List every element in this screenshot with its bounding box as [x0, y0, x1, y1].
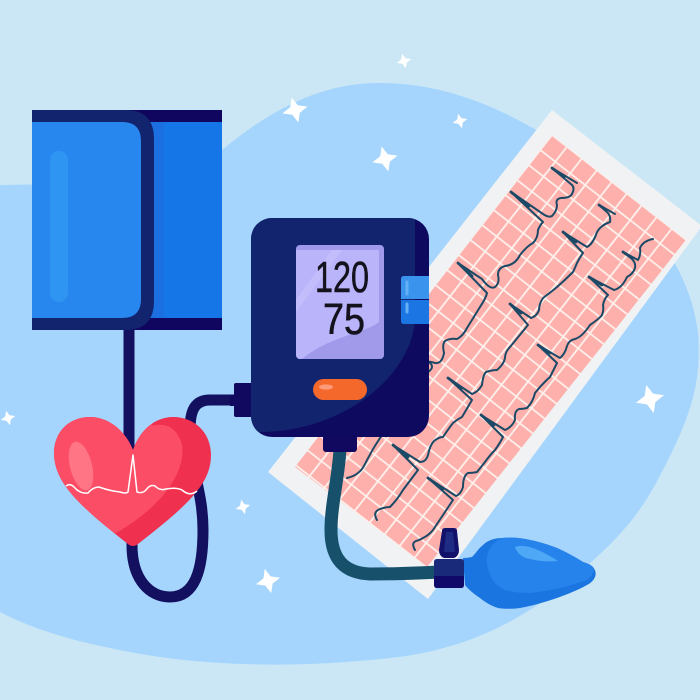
- collar upper: [434, 559, 464, 577]
- heart pulse line: [66, 455, 197, 494]
- monitor: [230, 218, 429, 452]
- screen base: [296, 245, 384, 359]
- cuff back: [32, 110, 222, 330]
- button glint: [319, 384, 333, 390]
- cuff highlight: [50, 151, 68, 302]
- cuff bands: [32, 110, 222, 330]
- paper sheet: [268, 110, 700, 599]
- star 3: [451, 112, 469, 130]
- button base: [313, 379, 367, 400]
- valve nut: [439, 528, 459, 558]
- star 8: [253, 566, 283, 596]
- monitor body light area: [251, 218, 415, 432]
- stars: [0, 52, 668, 596]
- side tab: [401, 276, 429, 324]
- valve nut shine: [444, 532, 455, 552]
- bulb body: [463, 538, 596, 609]
- bulb light area: [487, 538, 594, 593]
- valve collar: [434, 528, 464, 588]
- pink grid: [295, 135, 686, 567]
- heart light area: [54, 417, 182, 534]
- orange button: [313, 379, 367, 400]
- cuff front panel: [32, 122, 141, 318]
- trace top: [347, 168, 577, 478]
- blood pressure cuff: [32, 110, 222, 330]
- trace middle: [375, 205, 615, 520]
- heart base: [54, 417, 211, 546]
- screen light area: [296, 250, 379, 359]
- ECG traces: [347, 168, 653, 550]
- heart: [54, 417, 211, 546]
- side tab glints: [406, 282, 408, 312]
- left connector: [230, 383, 251, 417]
- spike thick tips: [393, 168, 631, 489]
- screen: [296, 245, 384, 359]
- cuff front flap: [32, 110, 154, 330]
- screen sheen: [296, 250, 342, 312]
- star 4: [369, 143, 401, 175]
- star 6: [0, 409, 17, 427]
- monitor body: [251, 218, 429, 437]
- star 5: [632, 381, 668, 417]
- star 1: [279, 94, 311, 126]
- trace bottom: [413, 239, 653, 550]
- star 7: [234, 498, 252, 516]
- heart highlight: [64, 439, 98, 493]
- systolic reading: 120: [315, 253, 369, 302]
- bottom connector: [323, 432, 357, 452]
- squeeze bulb: [434, 528, 596, 609]
- cuff shadow strip: [150, 122, 164, 318]
- side tab lower: [401, 300, 429, 324]
- hose to bulb: [331, 450, 440, 574]
- bulb highlight: [515, 546, 558, 561]
- star 2: [395, 52, 413, 70]
- diastolic reading: 75: [323, 295, 365, 344]
- side tab upper: [401, 276, 429, 299]
- cuff tube: [129, 325, 240, 597]
- ECG paper: [268, 110, 700, 599]
- collar lower: [434, 576, 464, 588]
